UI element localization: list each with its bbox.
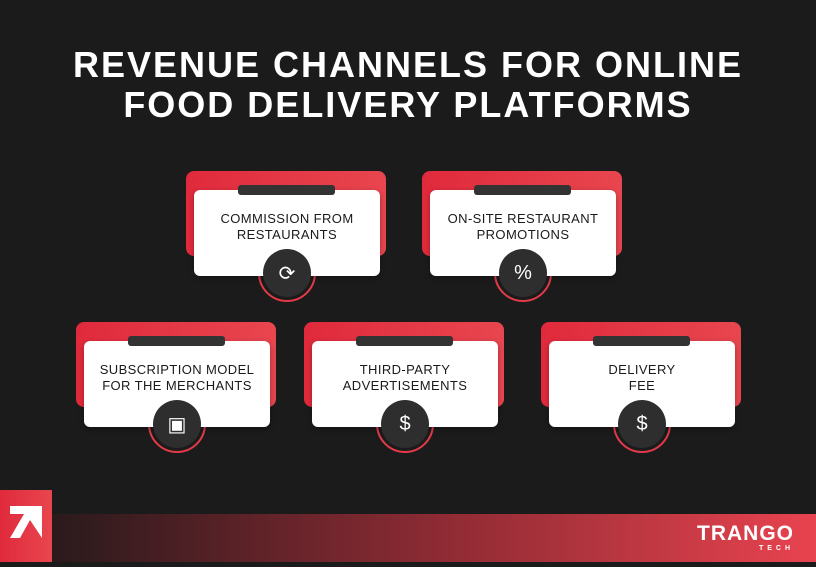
icon: box: $ [636, 412, 648, 434]
title: FOOD DELIVERY PLATFORMS [123, 84, 693, 125]
text: promotions: ON-SITE RESTAURANT [448, 211, 598, 226]
title [73, 44, 743, 125]
panel: commission [186, 171, 386, 302]
panel: promotions [422, 171, 622, 302]
icon: coin hand [263, 249, 311, 297]
icon: coin hand: ⟳ [279, 262, 295, 284]
footer band [52, 514, 816, 562]
icon: cloche [499, 249, 547, 297]
text: delivery fee [608, 362, 676, 393]
text: advertisements: THIRD-PARTY [360, 362, 450, 377]
panel: advertisements [304, 322, 504, 453]
logo mark [0, 490, 52, 562]
text: delivery fee: DELIVERY [608, 362, 676, 377]
text: promotions [448, 211, 598, 242]
icon: megaphone [381, 400, 429, 448]
icon: box [618, 400, 666, 448]
text: subscription: FOR THE MERCHANTS [102, 378, 252, 393]
text: commission: RESTAURANTS [237, 227, 337, 242]
text: promotions: PROMOTIONS [477, 227, 569, 242]
panel: delivery fee [541, 322, 741, 453]
text: subscription [100, 362, 254, 393]
brand: TRANGO [697, 522, 794, 545]
icon: browser [153, 400, 201, 448]
icon: cloche: % [514, 262, 532, 284]
brand: TECH [759, 545, 794, 552]
panel: subscription [76, 322, 276, 453]
text: advertisements [342, 362, 467, 393]
text: commission: COMMISSION FROM [220, 211, 354, 226]
title: REVENUE CHANNELS FOR ONLINE [73, 44, 743, 85]
text: delivery fee: FEE [629, 378, 655, 393]
icon: browser: ▣ [168, 414, 186, 436]
icon: megaphone: $ [399, 412, 411, 434]
text: commission [220, 211, 354, 242]
text: subscription: SUBSCRIPTION MODEL [100, 362, 254, 377]
text: advertisements: ADVERTISEMENTS [343, 378, 467, 393]
